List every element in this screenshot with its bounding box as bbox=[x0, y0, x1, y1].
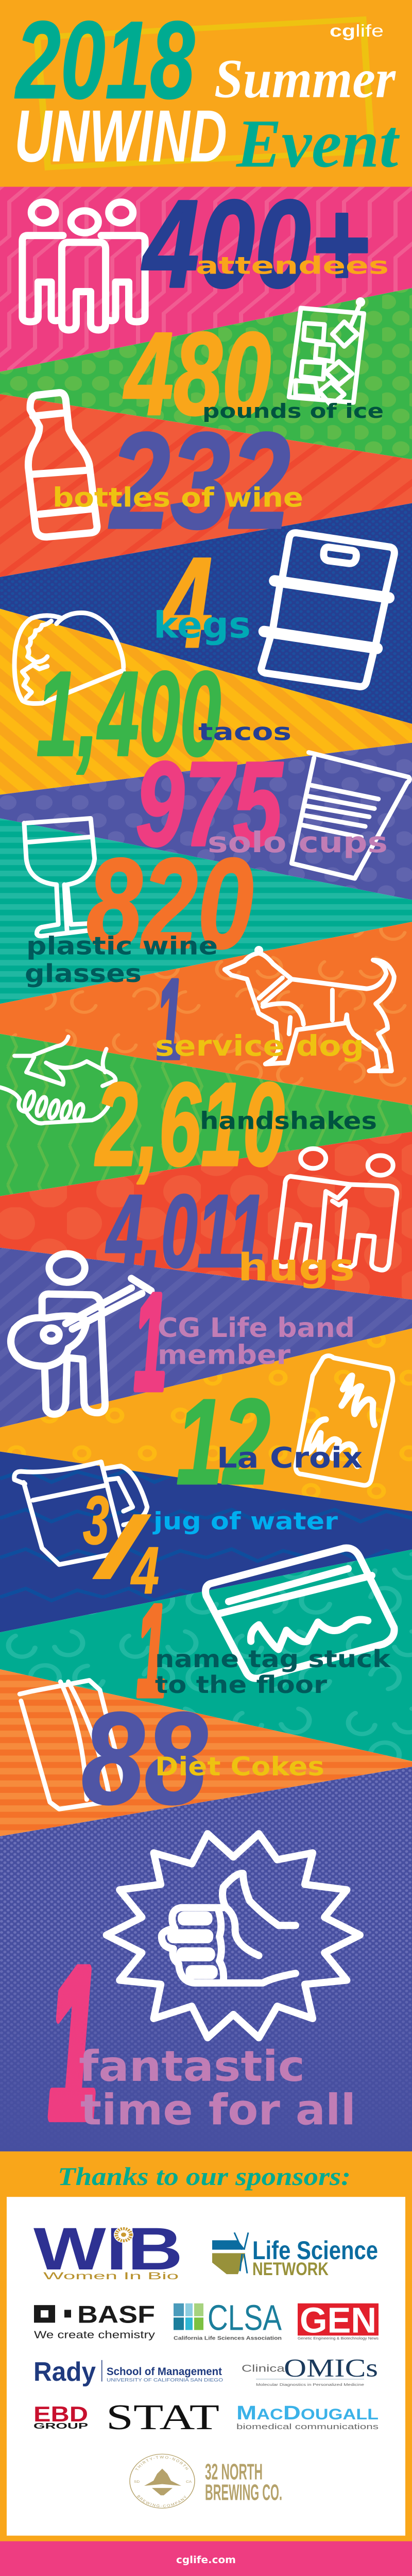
logo: EBD Group: GROUP bbox=[33, 2421, 89, 2431]
logo: Clinical OMICs bbox=[242, 2353, 378, 2387]
logo: Clinical OMICs: OMICs bbox=[284, 2353, 378, 2382]
panel: service dog: 1 bbox=[157, 955, 183, 1082]
label: plastic wine glasses: glasses bbox=[25, 959, 142, 988]
logo: Women In Bio: Women In Bio bbox=[43, 2271, 179, 2282]
icon: name tag bbox=[205, 1548, 394, 1679]
icon: taco bbox=[14, 613, 124, 703]
logo: Clinical OMICs: Molecular Diagnostics in Personalized Medicine bbox=[256, 2382, 364, 2387]
panel: hugs bbox=[106, 1149, 397, 1290]
logo: cglife: cglife bbox=[330, 21, 384, 40]
label: plastic wine glasses: plastic wine bbox=[26, 931, 218, 960]
band: fantastic time bbox=[0, 1767, 412, 2151]
band: name tag bbox=[0, 1550, 412, 1761]
number: 232: 232 bbox=[109, 404, 290, 557]
label: jug of water: jug of water bbox=[152, 1507, 338, 1535]
title: UNWIND: UNWIND bbox=[14, 95, 227, 177]
band: handshakes bbox=[0, 1034, 412, 1196]
icon: keg bbox=[261, 533, 394, 687]
number: 480: 480 bbox=[123, 309, 271, 439]
label: handshakes: handshakes bbox=[200, 1107, 377, 1135]
label: hugs: hugs bbox=[238, 1246, 355, 1290]
logo: EBD Group: EBD bbox=[33, 2402, 88, 2426]
panel: band member bbox=[11, 1254, 355, 1419]
number: 4: 4 bbox=[158, 530, 213, 674]
panel: jug of water bbox=[14, 1462, 338, 1608]
icon: cup of soda bbox=[20, 1681, 124, 1809]
panel: fantastic time: 1 bbox=[48, 1923, 98, 2163]
band: ice bbox=[0, 288, 412, 460]
band: la croix bbox=[0, 1328, 412, 1511]
icon: dog bbox=[225, 948, 394, 1071]
sponsors panel bbox=[0, 2151, 412, 2541]
header background bbox=[0, 0, 412, 187]
label: CG Life band member: member bbox=[158, 1340, 290, 1370]
panel: wine bbox=[28, 393, 303, 557]
panel: tacos bbox=[14, 613, 291, 781]
icon: glass of ice bbox=[289, 299, 364, 405]
label: service dog: service dog bbox=[155, 1030, 364, 1063]
panel: band member: 1 bbox=[134, 1265, 167, 1419]
label: pounds of ice: pounds of ice bbox=[202, 400, 384, 422]
icon: two people hugging bbox=[276, 1149, 397, 1270]
footer bar bbox=[0, 2541, 412, 2576]
band: service dog bbox=[0, 922, 412, 1105]
panel: solo cups bbox=[135, 737, 409, 878]
label: fantastic time for all: time for all bbox=[80, 2086, 356, 2134]
band: tacos bbox=[0, 609, 412, 794]
number: 975: 975 bbox=[135, 737, 284, 871]
logo: 32 North Brewing: BREWING-COMPANY bbox=[137, 2495, 186, 2507]
logo: 32 North Brewing bbox=[129, 2453, 282, 2509]
sponsors background bbox=[0, 2151, 412, 2541]
number: 3/4: / bbox=[93, 1500, 151, 1596]
panel: diet cokes bbox=[20, 1681, 324, 1832]
label: attendees: attendees bbox=[196, 252, 389, 280]
label: fantastic time for all: fantastic bbox=[79, 2042, 305, 2091]
label: solo cups: solo cups bbox=[208, 826, 388, 859]
label: bottles of wine: bottles of wine bbox=[53, 482, 303, 513]
icon: jug bbox=[14, 1462, 147, 1565]
icon: wine bottle bbox=[28, 393, 97, 537]
band: jug of water bbox=[0, 1452, 412, 1632]
label: name tag stuck to the floor: to the floor bbox=[155, 1671, 328, 1699]
logo: Life Science Network: NETWORK bbox=[252, 2259, 329, 2279]
panel: handshakes bbox=[0, 1037, 377, 1191]
label: name tag stuck to the floor bbox=[155, 1645, 391, 1699]
label: La Croix: La Croix bbox=[217, 1442, 363, 1475]
logo: MacDougall: MACDOUGALL bbox=[236, 2401, 379, 2424]
logo: STAT: STAT bbox=[106, 2397, 219, 2437]
title: 2018: 2018 bbox=[14, 0, 195, 121]
sponsors box bbox=[7, 2197, 405, 2536]
band: wine bbox=[0, 394, 412, 577]
band pattern: attendees bbox=[0, 187, 412, 372]
sponsors panel: BREWING CO. bbox=[205, 2480, 282, 2505]
number: 12: 12 bbox=[176, 1374, 270, 1510]
band: attendees bbox=[0, 187, 412, 372]
logo: 32 North Brewing: 32 NORTH bbox=[205, 2460, 263, 2484]
number: 4,011: 4,011 bbox=[106, 1173, 265, 1289]
panel: ice bbox=[123, 299, 384, 439]
icon: solo cup bbox=[291, 753, 409, 878]
band: hugs bbox=[0, 1132, 412, 1299]
panel: name tag bbox=[136, 1548, 394, 1724]
panel: kegs bbox=[153, 530, 394, 687]
number: 3/4: 3 bbox=[83, 1482, 109, 1559]
sponsors heading: Thanks to our sponsors: bbox=[58, 2162, 351, 2191]
icon: thumbs up in starburst bbox=[107, 1834, 360, 2038]
logo: 32 North Brewing: CA bbox=[186, 2480, 192, 2484]
title block bbox=[14, 0, 400, 181]
label: name tag stuck to the floor: name tag stuck bbox=[155, 1645, 391, 1673]
band fade: fantastic time bbox=[0, 1932, 412, 2151]
logo: MacDougall: biomedical communications bbox=[236, 2422, 379, 2431]
label: plastic wine glasses bbox=[25, 931, 218, 988]
band: kegs bbox=[0, 503, 412, 724]
logo: Rady School of Management: UNIVERSITY OF CALIFORNIA SAN DIEGO bbox=[107, 2378, 223, 2383]
panel: attendees bbox=[22, 174, 389, 330]
icon: guitarist bbox=[11, 1254, 151, 1414]
title frame bbox=[37, 20, 372, 167]
panel: la croix bbox=[176, 1356, 393, 1510]
number: 88: 88 bbox=[81, 1685, 208, 1832]
logo: BASF: We create chemistry bbox=[34, 2329, 155, 2341]
label: kegs: kegs bbox=[153, 604, 251, 647]
logo: GEN: GEN bbox=[300, 2300, 376, 2341]
logo: CLSA bbox=[174, 2298, 282, 2341]
logo: BASF bbox=[34, 2301, 155, 2341]
logo: Rady School of Management: School of Management bbox=[107, 2365, 222, 2378]
panel: plastic wine glasses bbox=[24, 819, 253, 988]
panel: name tag: 1 bbox=[136, 1578, 167, 1724]
panel: service dog bbox=[155, 948, 394, 1082]
icon: can bbox=[296, 1356, 393, 1485]
icon: three people bbox=[22, 202, 145, 330]
number: 3/4: 4 bbox=[130, 1534, 159, 1608]
panel: fantastic time bbox=[48, 1834, 360, 2163]
logo: GEN: Genetic Engineering & Biotechnology News bbox=[298, 2336, 379, 2341]
logo: CLSA: California Life Sciences Association bbox=[174, 2336, 282, 2341]
logo: Rady School of Management bbox=[33, 2357, 223, 2387]
icon: wine glass bbox=[24, 819, 95, 936]
footer url: cglife.com bbox=[176, 2554, 236, 2566]
label: fantastic time for all bbox=[79, 2042, 356, 2134]
label: Diet Cokes: Diet Cokes bbox=[155, 1752, 324, 1782]
band: plastic wine glasses bbox=[0, 818, 412, 1004]
label: CG Life band member bbox=[158, 1313, 355, 1370]
logo: CLSA: CLSA bbox=[208, 2298, 282, 2338]
label: CG Life band member: CG Life band bbox=[158, 1313, 355, 1344]
number: 1,400: 1,400 bbox=[37, 647, 221, 781]
band: band member bbox=[0, 1248, 412, 1428]
label: tacos: tacos bbox=[198, 718, 291, 746]
logo: 32 North Brewing: THIRTY-TWO-NORTH bbox=[135, 2455, 188, 2470]
logo: 32 North Brewing: SD bbox=[134, 2480, 140, 2484]
number: 3/4 bbox=[83, 1482, 159, 1608]
logo: Clinical OMICs: Clinical bbox=[242, 2363, 288, 2374]
icon: handshake bbox=[0, 1037, 115, 1123]
band: diet cokes bbox=[0, 1669, 412, 1836]
logo: Rady School of Management: Rady bbox=[33, 2357, 96, 2387]
number: 820: 820 bbox=[87, 833, 253, 975]
logo: Women In Bio: WIB bbox=[33, 2215, 183, 2282]
logo: BASF: BASF bbox=[77, 2301, 155, 2328]
band: solo cups bbox=[0, 743, 412, 900]
logo: Life Science Network bbox=[212, 2232, 378, 2279]
